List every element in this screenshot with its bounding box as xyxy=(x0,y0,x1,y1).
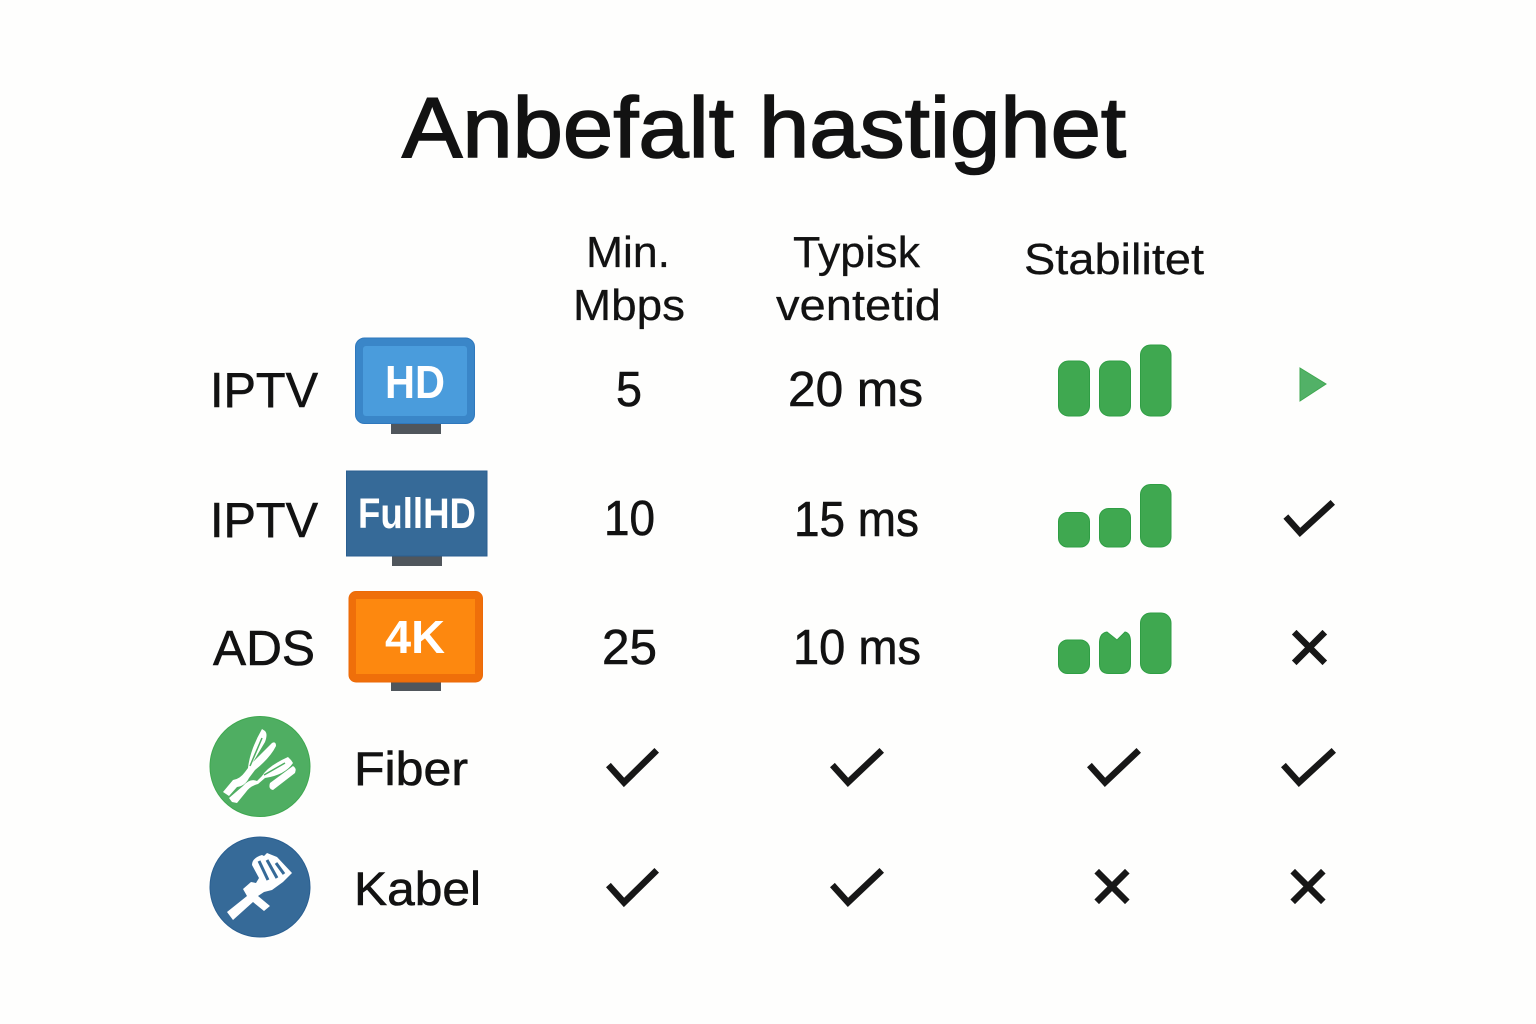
value: 15 ms: 15 ms xyxy=(794,493,919,547)
icon: 4K screen xyxy=(349,592,482,691)
column header: Stabilitet: Stabilitet xyxy=(1024,235,1204,284)
icon: check xyxy=(835,873,879,902)
icon: 4K screen: 4K xyxy=(385,611,445,663)
icon: check xyxy=(835,753,879,782)
signal bars xyxy=(1058,484,1171,547)
row 3: ADS 4K xyxy=(213,592,1322,691)
row 4: Fiber xyxy=(210,716,1331,816)
icon: cross xyxy=(1099,874,1125,900)
icon: check xyxy=(1286,753,1331,782)
icon: check xyxy=(1288,505,1330,532)
icon: HD screen: HD xyxy=(385,356,445,408)
icon: FullHD screen xyxy=(346,471,487,566)
icon: check xyxy=(1092,753,1136,782)
row 1: IPTV HD xyxy=(210,338,1326,434)
icon: fiber circle xyxy=(210,716,310,816)
icon: check xyxy=(611,873,654,902)
column header: Typisk ventetid: Typisk xyxy=(793,228,921,277)
value: 25 Mbps: 25 xyxy=(602,621,657,675)
value: 20 ms: 20 ms xyxy=(788,363,923,417)
icon: cross xyxy=(1296,634,1322,660)
title: Anbefalt hastighet xyxy=(402,81,1126,176)
column header: Min. Mbps: Min. xyxy=(586,228,670,277)
row label: IPTV: IPTV xyxy=(210,364,318,418)
row 5: Kabel xyxy=(210,837,1321,937)
signal bars xyxy=(1058,345,1171,416)
column header: Min. Mbps xyxy=(573,228,685,330)
value: 10 Mbps: 10 xyxy=(604,492,655,546)
row label: Fiber: Fiber xyxy=(354,742,468,795)
column header: Typisk ventetid xyxy=(776,228,941,330)
row 2: IPTV FullHD xyxy=(210,471,1330,566)
icon: green play triangle xyxy=(1300,368,1326,401)
row label: ADS: ADS xyxy=(213,622,315,676)
row label: Kabel: Kabel xyxy=(354,862,481,915)
column header: Typisk ventetid: ventetid xyxy=(776,281,941,330)
value: 5 Mbps: 5 xyxy=(616,363,642,417)
value: 10 ms: 10 ms xyxy=(793,621,921,675)
icon: cable circle xyxy=(210,837,310,937)
icon: cross xyxy=(1295,874,1321,900)
row label: IPTV: IPTV xyxy=(210,494,318,548)
icon: check xyxy=(611,753,654,782)
icon: FullHD screen: FullHD xyxy=(358,490,476,538)
icon: HD screen xyxy=(356,338,474,434)
column header: Min. Mbps: Mbps xyxy=(573,281,685,330)
signal bars xyxy=(1058,613,1171,674)
